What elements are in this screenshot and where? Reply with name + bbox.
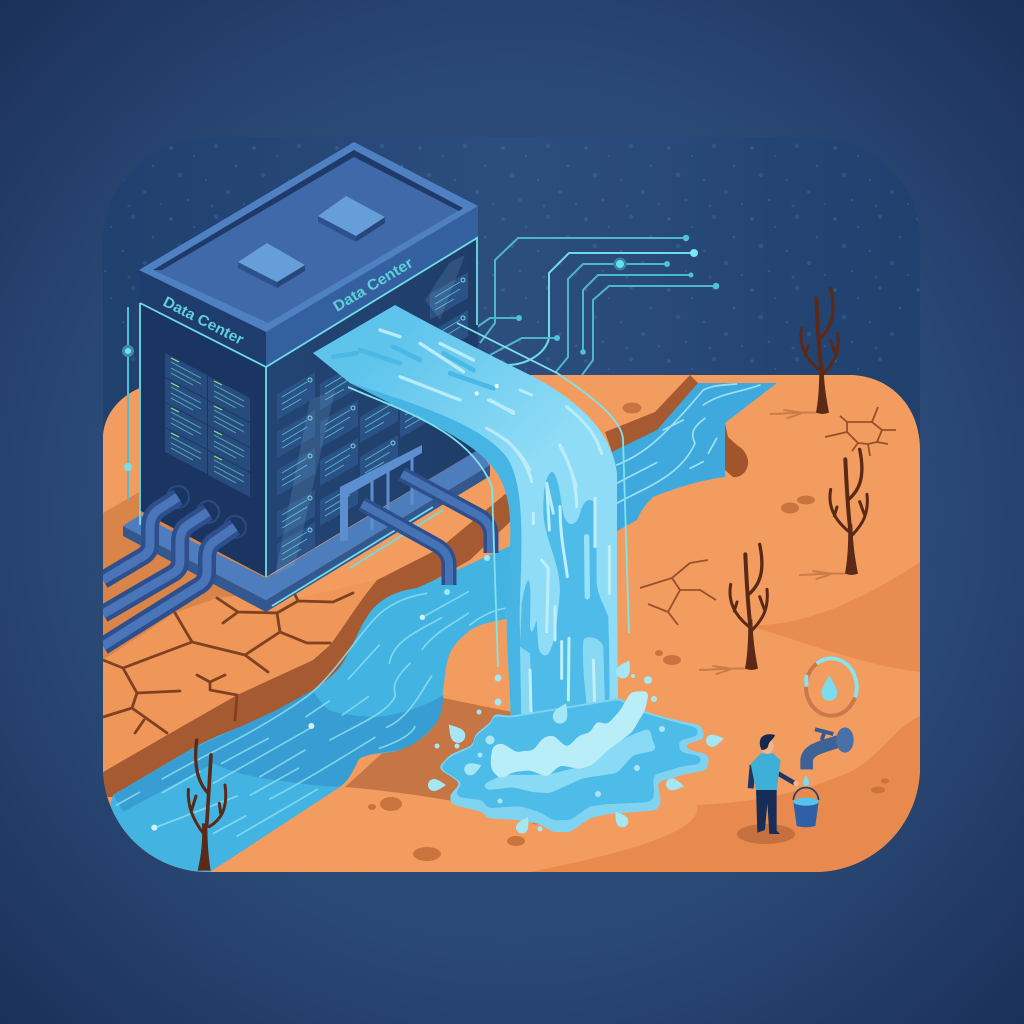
bucket water xyxy=(793,798,819,806)
ledge surface xyxy=(377,494,506,580)
upper ledge cliff xyxy=(605,375,698,452)
lower river xyxy=(103,545,512,872)
upper river streaks xyxy=(617,384,760,503)
hair xyxy=(760,734,775,750)
vent 1 xyxy=(238,243,305,288)
water level gauge xyxy=(806,658,857,716)
dead tree centre xyxy=(699,544,767,674)
droplets xyxy=(428,657,725,836)
cyan overlay curves xyxy=(348,323,629,667)
splash pool xyxy=(428,657,725,836)
dead tree middle right xyxy=(799,449,867,579)
pool main xyxy=(440,700,702,820)
data center building xyxy=(123,142,490,612)
water highlights in bend xyxy=(487,390,600,513)
label right: Data Center xyxy=(330,254,416,315)
outlet pipes right xyxy=(362,474,491,595)
circuit lines xyxy=(477,235,719,375)
dune shading upper right xyxy=(745,562,920,672)
dry shadow area near river xyxy=(345,698,512,801)
dune shading lower right xyxy=(530,716,920,872)
darker inner edge xyxy=(350,383,524,750)
head xyxy=(761,738,774,754)
darker ground below building xyxy=(103,492,270,659)
splash crown xyxy=(491,691,649,779)
cracked plateau cliff xyxy=(103,490,512,797)
server racks right xyxy=(277,272,468,570)
glass reflections xyxy=(275,255,465,575)
plateau surface xyxy=(103,580,377,772)
server racks left xyxy=(165,353,250,497)
bucket xyxy=(793,802,819,827)
dead tree bottom left xyxy=(188,740,226,871)
person shadow xyxy=(737,824,795,844)
right arm xyxy=(775,772,795,783)
plateau cracks xyxy=(103,588,353,733)
vent 2 xyxy=(318,196,385,242)
label left: Data Center xyxy=(160,293,246,349)
person with bucket xyxy=(737,734,819,844)
base plinth xyxy=(123,465,490,612)
panel: desert landscape xyxy=(103,375,920,872)
hand xyxy=(793,781,799,786)
left fascia xyxy=(139,270,266,367)
rocks xyxy=(368,402,889,861)
water body xyxy=(313,305,618,750)
left wall xyxy=(139,303,266,577)
glass outline xyxy=(140,238,477,577)
right fascia xyxy=(266,206,478,367)
right wall xyxy=(266,238,478,577)
left arm xyxy=(751,765,753,788)
ground cracks right xyxy=(640,407,896,625)
panel: rounded scene with night sky xyxy=(103,137,920,872)
outlet frame xyxy=(340,445,422,542)
ground base xyxy=(103,375,920,872)
plinth top xyxy=(123,450,490,600)
legs xyxy=(756,788,780,834)
bucket handle xyxy=(793,787,819,800)
left sensor line xyxy=(122,307,134,500)
pool outline xyxy=(438,698,709,832)
water highlights in top ribbon xyxy=(333,330,513,413)
shirt xyxy=(751,753,781,790)
inner shelf xyxy=(482,728,657,793)
roof deck xyxy=(153,150,463,323)
intake pipes left xyxy=(103,486,246,646)
cyan lines on ledge xyxy=(272,507,443,606)
river current streaks xyxy=(117,592,505,836)
faucet xyxy=(803,727,854,787)
darker river band xyxy=(113,690,443,812)
dead tree top right xyxy=(770,288,838,418)
roof rim xyxy=(139,142,478,332)
upper river xyxy=(610,383,777,535)
roof inner shadow xyxy=(153,150,463,270)
fall centre and drips xyxy=(507,440,609,750)
eroded bank xyxy=(725,423,748,477)
waterfall xyxy=(313,305,618,750)
